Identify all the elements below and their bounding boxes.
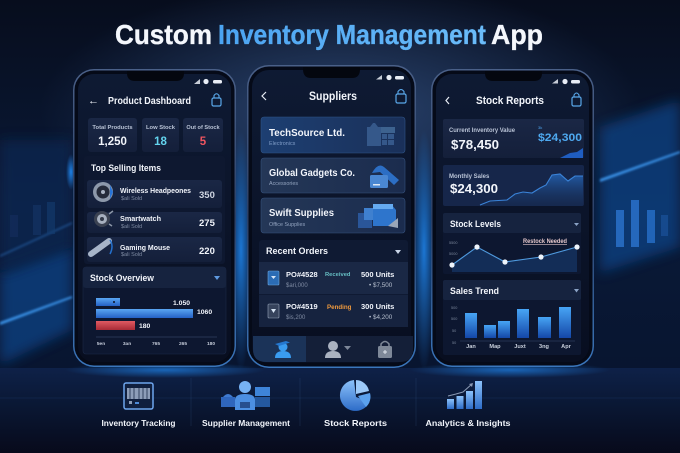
bar chart: sales trend: 3ng (539, 344, 550, 350)
feature: supplier management: Supplier Management (202, 418, 290, 428)
order: PO#4528 (259, 262, 408, 294)
card: current inventory value: $24,300 (538, 132, 582, 144)
card: swift supplies (261, 198, 405, 233)
bar chart: stock overview: 180 (207, 341, 215, 347)
bar chart: stock overview: 180 (139, 323, 151, 330)
card: current inventory value: 3k (538, 125, 542, 130)
icon: supplier with boxes (221, 381, 270, 410)
card: monthly sales: Monthly Sales (449, 174, 490, 180)
tab bar (253, 336, 413, 362)
phone 1: product dashboard (73, 69, 236, 367)
feature: inventory tracking (102, 383, 176, 428)
footer band (0, 362, 680, 453)
heading: stock reports: Stock Reports (476, 95, 544, 107)
phone 2: suppliers (247, 65, 416, 368)
order: PO#4519 (259, 295, 408, 327)
bar chart: stock overview: 265 (179, 341, 187, 347)
item: gaming mouse: $ali Sold (121, 252, 142, 258)
icon: barcode scanner (124, 383, 153, 409)
icon: person menu (325, 341, 351, 358)
item: wireless headphones: $ali Sold (121, 196, 142, 202)
panel: recent orders (259, 240, 408, 327)
card: swift supplies: Office Supplies (269, 222, 305, 228)
stat: low stock: 18 (154, 136, 167, 148)
bar chart: stock overview: 765 (152, 341, 160, 347)
heading: product dashboard (88, 94, 221, 107)
card: global gadgets: Global Gadgets Co. (269, 168, 355, 179)
callout: restock needed: Restock Needed (523, 238, 567, 245)
stat: out of stock (183, 118, 223, 152)
status icons (194, 79, 222, 84)
order: PO#4519: $is,200 (286, 315, 306, 321)
order: PO#4528: $ari,000 (286, 283, 308, 289)
item: smartwatch (87, 211, 222, 233)
order: PO#4528: Received (325, 272, 351, 278)
item: gaming mouse (87, 237, 222, 262)
item: wireless headphones (87, 180, 222, 208)
card: techsource (261, 117, 405, 153)
item: gaming mouse: Gaming Mouse (120, 243, 170, 252)
bar chart: sales trend: 50 (452, 341, 456, 345)
panel: sales trend: Sales Trend (450, 286, 499, 296)
feature: supplier management (202, 381, 290, 428)
order: PO#4519: PO#4519 (286, 302, 318, 311)
icon: lock (378, 342, 392, 358)
item: smartwatch: Smartwatch (120, 214, 161, 223)
feature: analytics and insights (426, 381, 511, 428)
line chart: stock levels: 5500 (449, 241, 457, 245)
heading: product dashboard: Product Dashboard (108, 96, 191, 107)
card: current inventory value: $78,450 (451, 137, 499, 152)
phone 3: stock reports (431, 69, 594, 367)
bar chart: stock overview: 1.050 (173, 300, 190, 307)
icon: pie chart (340, 380, 371, 411)
panel: top selling items: Top Selling Items (91, 163, 161, 173)
panel: sales trend (443, 280, 581, 355)
title: App (491, 19, 543, 50)
card: monthly sales (443, 165, 584, 206)
card: monthly sales: $24,300 (450, 181, 498, 196)
bar chart: sales trend: Map (489, 344, 501, 350)
status icons (376, 75, 404, 80)
order: PO#4519: • $4,200 (369, 314, 393, 321)
card: techsource: Electronics (269, 141, 296, 147)
title: Inventory Management (218, 19, 486, 50)
bar chart: sales trend: 500 (451, 317, 457, 321)
bar chart: sales trend: Juxt (514, 344, 526, 350)
area chart: monthly sales (480, 174, 583, 206)
bar chart: sales trend (451, 306, 575, 350)
panel: stock levels: Stock Levels (450, 219, 501, 229)
bar chart: stock overview: 3an (123, 341, 131, 347)
heading: product dashboard: ← (88, 95, 99, 107)
line chart: stock levels: 5000 (449, 252, 457, 256)
icon: rising bars (447, 381, 482, 409)
stat: out of stock: 5 (200, 136, 207, 148)
feature: stock reports (324, 380, 387, 428)
stat: out of stock: Out of Stock (186, 125, 221, 131)
card: current inventory value (443, 119, 584, 158)
sparkline (560, 148, 583, 158)
stat: total products (88, 118, 137, 152)
heading: suppliers: Suppliers (309, 91, 357, 103)
card: global gadgets: Accessories (269, 181, 298, 187)
line chart: stock levels (449, 238, 580, 272)
bar chart: sales trend: Apr (561, 344, 572, 350)
feature: analytics and insights: Analytics & Insights (426, 418, 511, 428)
panel: stock levels (443, 213, 581, 274)
feature: inventory tracking: Inventory Tracking (102, 418, 176, 428)
panel: stock overview: Stock Overview (90, 273, 154, 283)
feature: stock reports: Stock Reports (324, 418, 387, 428)
card: global gadgets (261, 158, 405, 193)
stat: low stock (142, 118, 179, 152)
icon: active person (275, 341, 291, 358)
status icons (552, 79, 580, 84)
order: PO#4528: PO#4528 (286, 270, 318, 279)
card: current inventory value: Current Inventory Value (449, 127, 516, 134)
card: techsource: TechSource Ltd. (269, 128, 345, 139)
panel: stock overview (83, 267, 226, 354)
bar chart: sales trend: Jan (466, 344, 476, 350)
panel: top selling items (84, 156, 225, 264)
bar chart: sales trend: 50 (452, 329, 456, 333)
item: gaming mouse: 220 (199, 246, 215, 257)
order: PO#4528: 500 Units (361, 270, 394, 279)
title: Custom (115, 19, 212, 50)
bar chart: sales trend: 500 (451, 306, 457, 310)
order: PO#4528: • $7,500 (369, 282, 393, 289)
item: wireless headphones: 350 (199, 190, 215, 201)
heading: suppliers (262, 90, 406, 103)
stat: total products: Total Products (92, 125, 133, 131)
order: PO#4519: Pending (327, 304, 352, 311)
panel: recent orders: Recent Orders (266, 246, 328, 256)
heading: stock reports (446, 93, 581, 107)
item: smartwatch: $ali Sold (121, 224, 142, 230)
bar chart: stock overview (96, 298, 217, 347)
bar chart: stock overview: 5en (97, 341, 105, 347)
stat: total products: 1,250 (98, 136, 127, 148)
stat: low stock: Low Stock (146, 125, 176, 131)
item: wireless headphones: Wireless Headpeones (120, 186, 191, 195)
item: smartwatch: 275 (199, 218, 216, 229)
order: PO#4519: 300 Units (361, 302, 394, 311)
card: swift supplies: Swift Supplies (269, 208, 335, 219)
bar chart: stock overview: 1060 (197, 309, 212, 316)
